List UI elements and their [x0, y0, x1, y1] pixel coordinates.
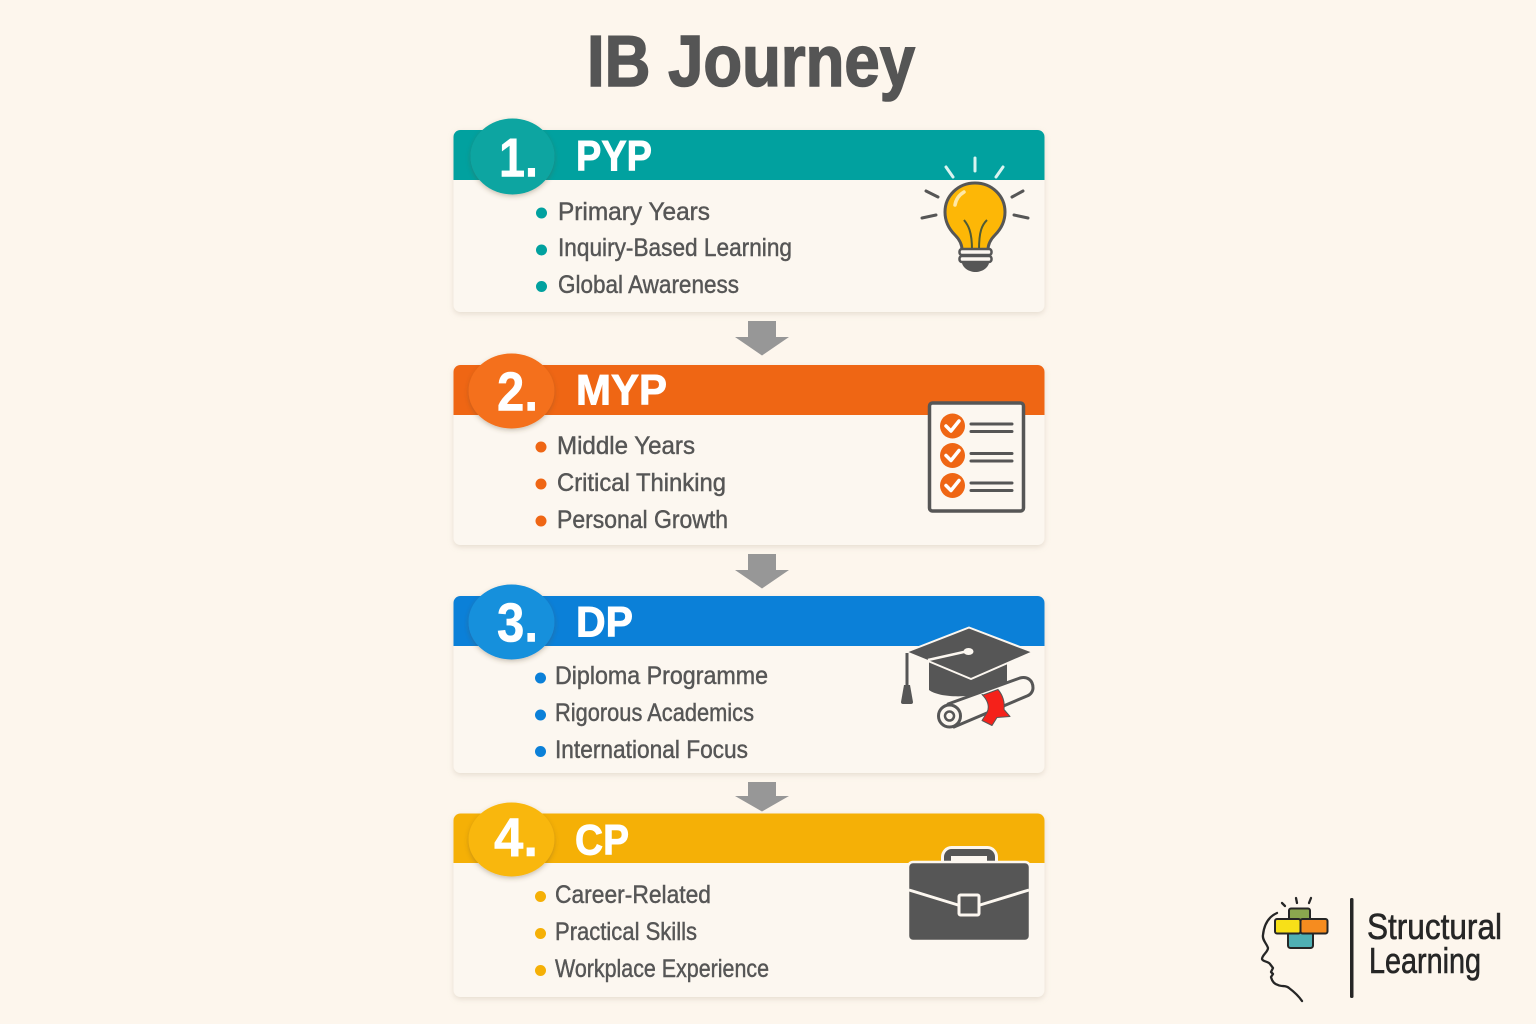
panel: DP [454, 584, 1044, 773]
number badge: 1 [470, 118, 554, 194]
bullet list: MYP: Critical Thinking [557, 469, 726, 497]
arrow: PYP to MYP [735, 321, 789, 356]
bullet list: CP: Career-Related [555, 881, 711, 909]
bullet list: DP: Rigorous Academics [555, 699, 754, 727]
number badge: 4: 4. [494, 806, 538, 868]
wordmark [1367, 906, 1502, 981]
bullet list: PYP: Inquiry-Based Learning [558, 234, 792, 262]
bullet list: DP: International Focus [555, 736, 748, 764]
title: IB Journey [587, 22, 915, 102]
bullet list: PYP [536, 198, 792, 299]
number badge: 2 [468, 354, 554, 428]
heading: CP: CP [575, 816, 629, 864]
icon: briefcase [908, 848, 1030, 941]
number badge: 2: 2. [497, 360, 538, 422]
arrow: MYP to DP [735, 554, 789, 588]
panel: CP [454, 802, 1044, 997]
bullet list: MYP: Personal Growth [557, 506, 728, 534]
bullet list: MYP [536, 432, 728, 534]
icon: head with blocks [1262, 898, 1328, 1001]
number badge: 1: 1. [499, 126, 538, 188]
icon: light bulb [922, 158, 1028, 272]
bullet list: MYP: Middle Years [557, 432, 695, 460]
number badge: 3: 3. [497, 592, 538, 654]
bullet list: PYP: Primary Years [558, 198, 710, 226]
bullet list: CP: Practical Skills [555, 918, 697, 946]
icon: checklist [930, 403, 1024, 511]
number badge: 3 [468, 584, 554, 660]
wordmark: Learning [1369, 940, 1481, 981]
heading: MYP: MYP [576, 366, 667, 414]
bullet list: CP: Workplace Experience [555, 955, 769, 983]
bullet list: CP [535, 881, 769, 983]
number badge: 4 [468, 802, 554, 876]
heading: DP: DP [576, 598, 633, 646]
bullet list: PYP: Global Awareness [558, 271, 739, 299]
bullet list: DP [535, 662, 768, 764]
logo: Structural Learning [1262, 898, 1502, 1001]
icon: graduation cap and diploma [901, 628, 1033, 727]
bullet list: DP: Diploma Programme [555, 662, 768, 690]
wordmark: Structural [1367, 906, 1502, 947]
arrow: DP to CP [735, 782, 789, 812]
divider [1350, 898, 1354, 998]
panel: MYP [454, 354, 1044, 545]
panel: PYP [454, 118, 1044, 312]
heading: PYP: PYP [576, 132, 652, 180]
